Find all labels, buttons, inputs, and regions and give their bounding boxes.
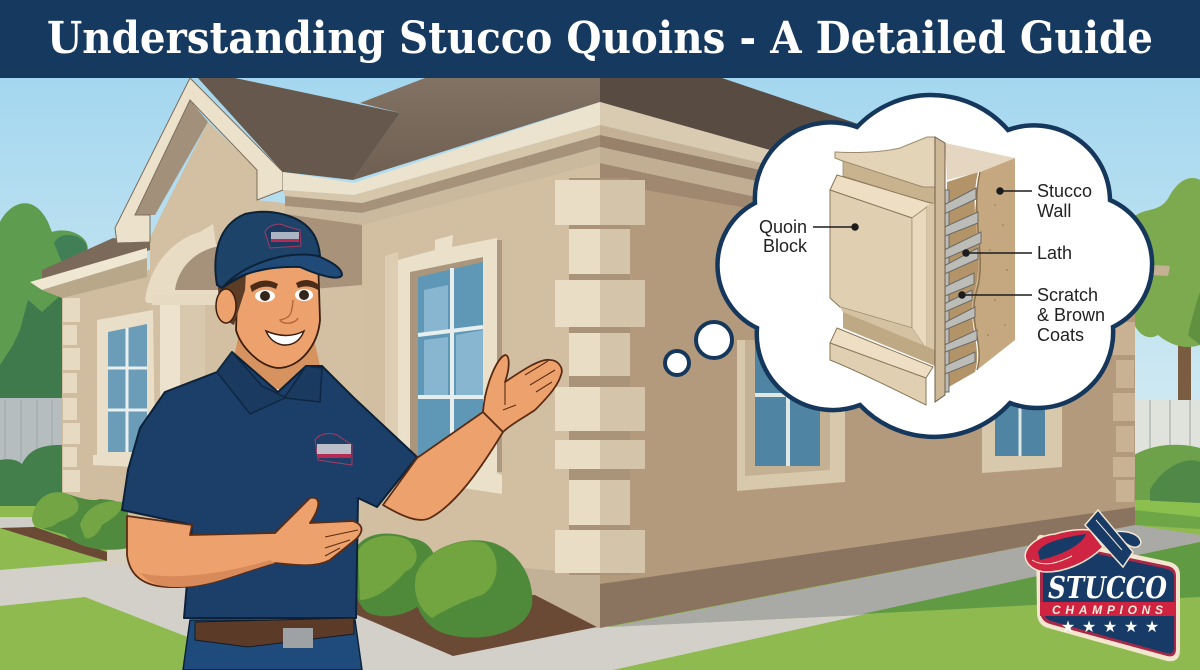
right window xyxy=(737,340,845,491)
lower neck xyxy=(843,312,935,366)
belt xyxy=(195,618,354,648)
lath strips xyxy=(940,188,981,392)
center walkway xyxy=(340,600,862,670)
smile xyxy=(266,331,304,345)
ground base xyxy=(0,405,1200,670)
cornice right xyxy=(600,102,770,200)
center window xyxy=(385,235,502,500)
left main wall xyxy=(362,163,600,590)
corner quoins xyxy=(555,180,645,573)
cornice end at far right xyxy=(1100,262,1170,276)
left tree xyxy=(0,203,88,400)
cap xyxy=(215,212,342,288)
right main wall xyxy=(600,163,1135,585)
thought bubble small xyxy=(665,322,732,375)
shirt xyxy=(122,352,417,618)
logo stars: ★ xyxy=(1124,617,1138,636)
label: lath: Lath xyxy=(1037,243,1072,263)
logo subtitle: CHAMPIONS xyxy=(1052,603,1163,617)
eyes and brows xyxy=(250,280,319,302)
block face xyxy=(830,190,912,328)
collar xyxy=(217,352,322,414)
badge xyxy=(1036,535,1180,661)
swoosh xyxy=(1025,530,1103,572)
wall specks xyxy=(987,204,1008,336)
logo stars: ★ xyxy=(1061,617,1075,636)
logo stars: ★ xyxy=(1145,617,1159,636)
coat edge xyxy=(974,172,980,370)
lower arm xyxy=(127,498,362,587)
far right lawn xyxy=(1134,500,1200,517)
hair xyxy=(218,272,246,325)
left plinth xyxy=(107,542,129,566)
right roof xyxy=(600,78,870,152)
left flower bed xyxy=(0,527,107,561)
lawn and walkways xyxy=(0,500,1200,670)
lower block xyxy=(830,328,933,405)
logo: Stucco Champions xyxy=(1025,510,1180,661)
label: scratch and brown coats: & Brown xyxy=(1037,305,1105,325)
label leaders xyxy=(813,188,1032,298)
logo wordmark: STUCCO xyxy=(1048,571,1167,606)
ear xyxy=(216,289,236,323)
brown coat xyxy=(947,172,978,388)
left shrubs xyxy=(32,492,128,550)
mulch bed xyxy=(350,590,597,656)
gable trim xyxy=(115,78,283,243)
gable wall xyxy=(150,122,362,560)
far window xyxy=(982,395,1062,473)
window lighter panes xyxy=(424,285,483,395)
shaded wall under cornice xyxy=(285,212,362,290)
window glass xyxy=(418,262,483,462)
title bar xyxy=(0,0,1200,78)
block bottom bevel xyxy=(840,307,927,350)
block side xyxy=(927,203,935,350)
top neck xyxy=(843,160,935,205)
thought bubble cloud xyxy=(718,95,1152,437)
right quoins xyxy=(1113,322,1135,502)
top cap left xyxy=(835,137,935,187)
left wing wall xyxy=(62,268,160,530)
logo stars: ★ xyxy=(1082,617,1096,636)
pants xyxy=(183,620,362,670)
undershirt xyxy=(270,388,295,412)
shirt logo xyxy=(315,434,352,465)
left walkway xyxy=(0,560,200,640)
house xyxy=(30,78,1170,628)
window frame xyxy=(398,235,502,494)
nose xyxy=(280,300,298,323)
trowel xyxy=(1085,510,1141,567)
window surround xyxy=(385,252,398,500)
neck xyxy=(232,330,322,412)
upper roof xyxy=(353,78,600,180)
label: quoin block: Quoin xyxy=(759,217,807,237)
front bushes xyxy=(354,534,532,637)
stucco wall section xyxy=(972,158,1015,370)
label: stucco wall: Stucco xyxy=(1037,181,1092,201)
worker xyxy=(122,212,562,670)
red band xyxy=(1040,602,1176,616)
window muntins xyxy=(418,268,483,462)
left wing roof xyxy=(42,238,150,285)
label: quoin block: Block xyxy=(763,236,808,256)
left small walkway xyxy=(0,517,34,528)
label: scratch and brown coats: Coats xyxy=(1037,325,1084,345)
corner column recess xyxy=(569,178,630,575)
dark lawn xyxy=(862,542,1200,614)
background hedges xyxy=(0,445,1200,506)
wall shadow under right cornice xyxy=(600,163,770,212)
raised hand xyxy=(483,355,562,432)
raised arm xyxy=(383,412,503,520)
right tree xyxy=(1125,178,1200,402)
corner strip xyxy=(935,137,945,402)
gable inner shadow xyxy=(135,100,208,215)
label: scratch and brown coats: Scratch xyxy=(1037,285,1098,305)
left wing quoins xyxy=(63,298,80,492)
left wing cornice xyxy=(30,248,147,298)
entry arch and column xyxy=(145,224,240,508)
top cap right xyxy=(945,143,1015,180)
sky xyxy=(0,78,1200,408)
foundation xyxy=(355,507,1135,628)
cornice left xyxy=(283,102,600,225)
window reveal xyxy=(410,257,483,466)
shaded walkway xyxy=(609,525,1200,627)
block top bevel xyxy=(830,175,935,218)
quoin cross-section diagram xyxy=(759,137,1105,405)
face xyxy=(236,258,320,368)
block right bevel xyxy=(912,207,927,350)
gable roof xyxy=(198,78,400,180)
left window xyxy=(93,310,155,467)
logo stars: ★ xyxy=(1103,617,1117,636)
fences xyxy=(0,398,1200,466)
label: stucco wall: Wall xyxy=(1037,201,1071,221)
window frame shadow xyxy=(497,240,502,472)
